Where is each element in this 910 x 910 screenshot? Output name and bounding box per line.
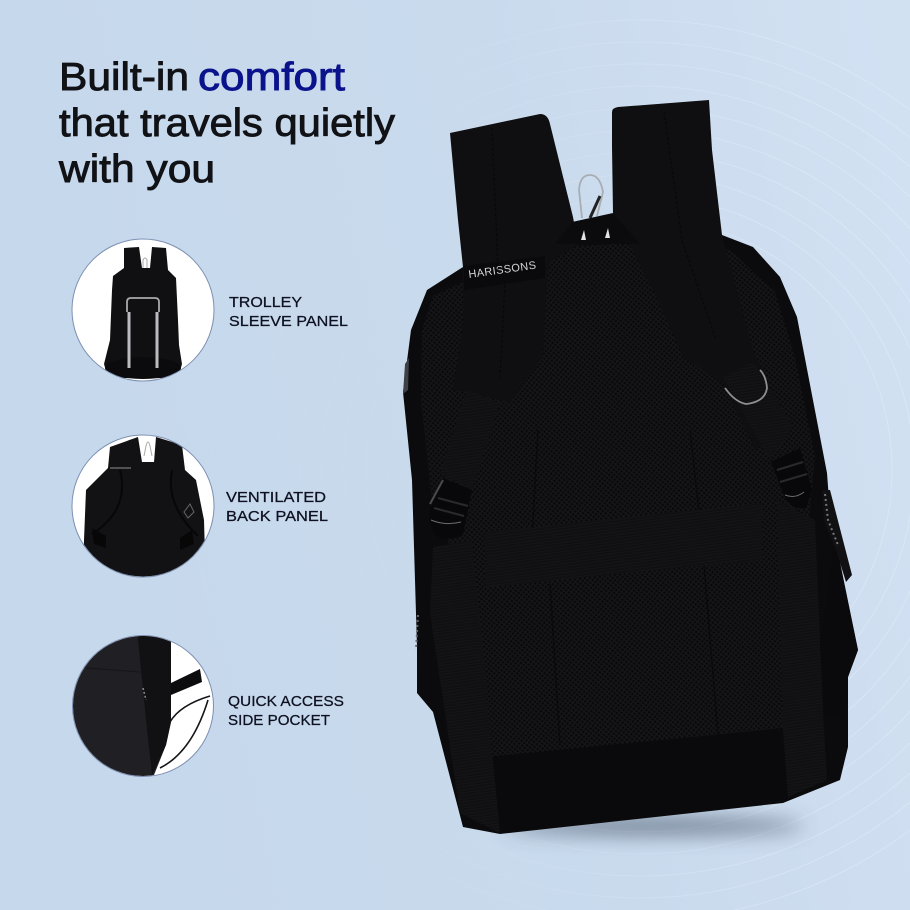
feature: trolley sleeve panel: [72, 239, 214, 381]
title: Built-in: [59, 56, 189, 99]
label: ventilated back panel: BACK PANEL: [226, 508, 328, 525]
backpack: [403, 100, 858, 834]
label: quick access side pocket: QUICK ACCESS: [228, 693, 344, 710]
base panel: [487, 728, 788, 832]
strap stitching: [492, 112, 716, 380]
backpack ground shadow: [505, 818, 805, 834]
feature: ventilated back panel: [72, 435, 214, 590]
feature: quick access side pocket: [72, 635, 214, 777]
label: trolley sleeve panel: SLEEVE PANEL: [229, 313, 348, 330]
brand label: [464, 256, 545, 290]
label: trolley sleeve panel: TROLLEY: [229, 294, 302, 311]
left lower webbing: [440, 390, 500, 490]
right shoulder strap: [612, 100, 787, 450]
label: quick access side pocket: [228, 693, 344, 729]
left zip detail: [416, 615, 418, 650]
carabiner clip: [579, 175, 603, 218]
label: ventilated back panel: [226, 489, 328, 525]
usb port: [403, 358, 409, 394]
title: comfort: [198, 56, 345, 99]
back mesh panel: [421, 243, 815, 757]
side flap: [820, 540, 858, 720]
label: ventilated back panel: VENTILATED: [226, 489, 326, 506]
mesh seams: [532, 430, 718, 745]
label: trolley sleeve panel: [229, 294, 348, 330]
title: that travels quietly: [59, 102, 396, 145]
zipper pins: [581, 228, 610, 240]
left shoulder strap: [450, 114, 578, 402]
label: quick access side pocket: SIDE POCKET: [228, 712, 330, 729]
right lower webbing: [723, 362, 793, 460]
right buckle: [771, 448, 812, 508]
right zip puller: [822, 490, 852, 582]
brand label: HARISSONS: [468, 260, 537, 281]
backpack body silhouette: [403, 232, 858, 834]
title: with you: [58, 148, 215, 191]
d-ring: [725, 370, 767, 404]
left buckle: [430, 478, 472, 539]
horizontal webbing band: [485, 503, 762, 587]
title: [58, 56, 396, 191]
